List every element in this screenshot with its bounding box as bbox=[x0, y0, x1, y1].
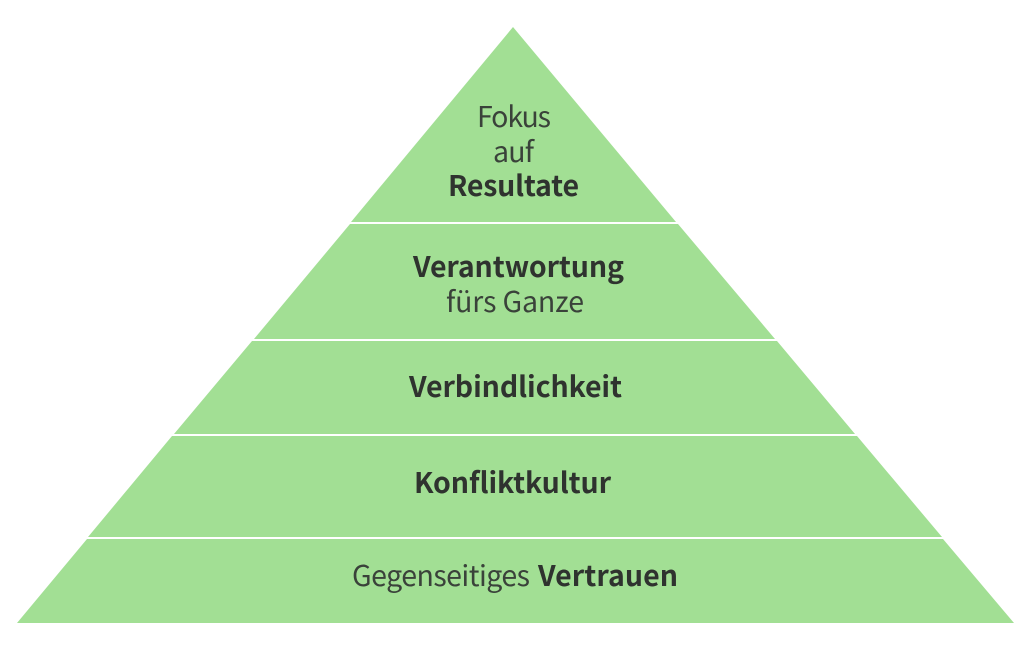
level 1: Fokus auf Resultate: Resultate bbox=[448, 164, 579, 205]
level 4: Konfliktkultur bbox=[88, 436, 942, 537]
level 1: Fokus auf Resultate bbox=[351, 27, 676, 222]
level 1: Fokus auf Resultate: Fokus bbox=[477, 95, 551, 136]
level 4: Konfliktkultur: Konfliktkultur bbox=[414, 461, 612, 502]
level 5: Gegenseitiges Vertrauen: Vertrauen bbox=[537, 554, 678, 595]
level 2: Verantwortung fürs Ganze bbox=[254, 224, 775, 339]
level 2: Verantwortung fürs Ganze: fürs Ganze bbox=[446, 280, 584, 321]
level 3: Verbindlichkeit bbox=[174, 341, 855, 434]
level 1: Fokus auf Resultate: auf bbox=[493, 130, 536, 171]
level 2: Verantwortung fürs Ganze: Verantwortung bbox=[412, 245, 624, 286]
level 5: Gegenseitiges Vertrauen bbox=[17, 539, 1014, 623]
level 3: Verbindlichkeit: Verbindlichkeit bbox=[408, 365, 622, 406]
level 5: Gegenseitiges Vertrauen: Gegenseitiges bbox=[352, 554, 530, 595]
